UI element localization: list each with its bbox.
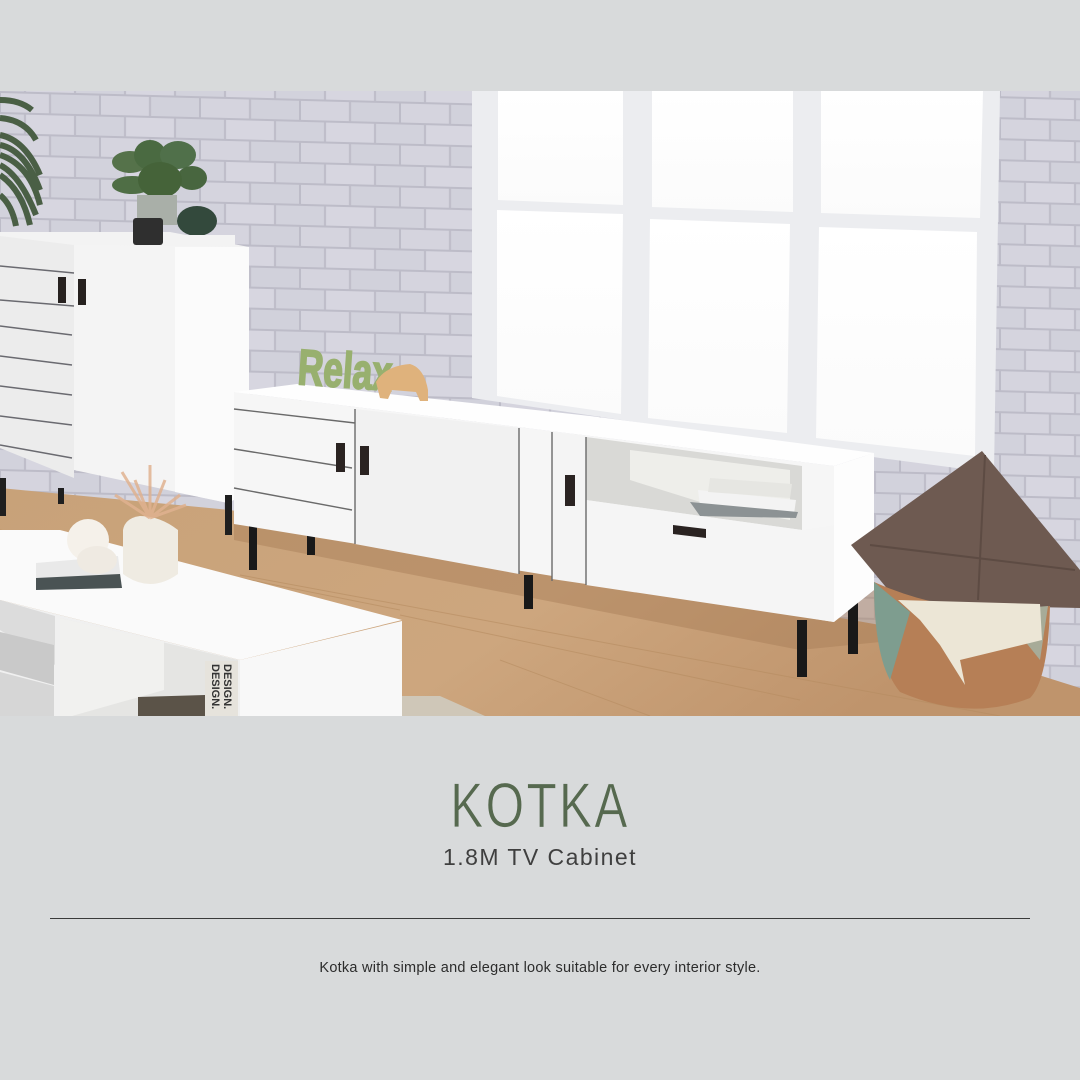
subtitle: 1.8M TV Cabinet	[443, 844, 637, 870]
woven basket with throw	[874, 582, 1050, 709]
coffee table: DESIGN.	[209, 664, 221, 709]
window	[472, 91, 1000, 473]
Relax sign and wooden rhino: Relax	[296, 339, 394, 402]
TV cabinet	[234, 384, 874, 677]
divider line	[50, 918, 1030, 919]
coffee table: DESIGN.	[221, 664, 233, 709]
brick wall	[0, 91, 1080, 716]
product photo: living room with TV cabinet	[0, 91, 1080, 716]
wood floor	[0, 488, 1080, 716]
cushion	[851, 451, 1080, 608]
left sideboard	[0, 232, 249, 535]
title: KOTKA	[450, 771, 630, 841]
plant, left edge	[0, 100, 40, 226]
cabinet legs	[249, 522, 858, 677]
coffee table	[0, 530, 402, 716]
table styling: vase, books and dried flowers	[36, 465, 186, 590]
description: Kotka with simple and elegant look suitable for every interior style.	[319, 960, 761, 976]
potted plant and vases	[112, 140, 235, 246]
